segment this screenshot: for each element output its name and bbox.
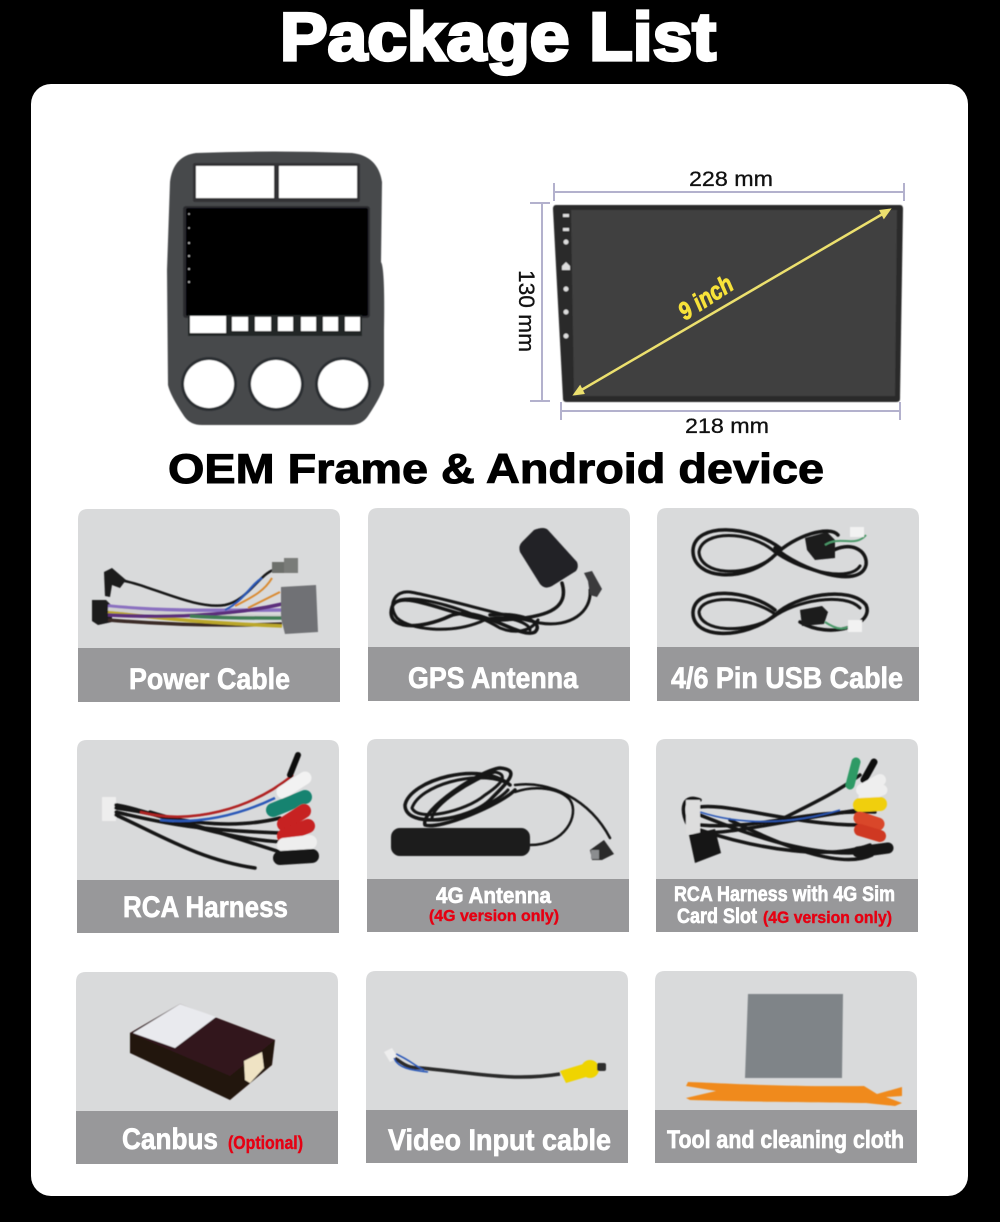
Android device with dimensions <box>514 168 904 438</box>
panel: RCA harness with 4G <box>656 739 918 932</box>
diagonal arrow <box>575 210 889 394</box>
label: Video Input cable <box>388 1124 611 1157</box>
panel: tool and cleaning cloth <box>655 971 917 1163</box>
width bottom: 218 mm <box>685 415 769 438</box>
note: (Optional) <box>228 1133 303 1153</box>
heading: OEM Frame & Android device <box>168 445 824 492</box>
panel: 4/6 pin USB cable <box>657 508 919 701</box>
label: RCA Harness <box>123 891 288 924</box>
9 inch label: 9 inch <box>673 270 739 326</box>
panel: video input cable <box>366 971 628 1163</box>
label: 4G Antenna <box>436 883 552 908</box>
label line 1: RCA Harness with 4G Sim <box>674 883 895 906</box>
title: Package List <box>280 0 716 75</box>
device screen <box>553 205 903 402</box>
panel: Canbus <box>76 972 338 1164</box>
note: (4G version only) <box>429 908 559 925</box>
panel: power cable <box>78 509 340 702</box>
label: GPS Antenna <box>408 662 578 695</box>
width top: 228 mm <box>689 168 773 191</box>
panel: 4G antenna <box>367 739 629 932</box>
height: 130 mm <box>514 270 539 352</box>
note: (4G version only) <box>763 908 892 927</box>
panel: GPS antenna <box>368 508 630 701</box>
dimension lines <box>530 183 904 420</box>
label: Power Cable <box>129 663 290 696</box>
label line 2: Card Slot <box>677 905 757 928</box>
label: Canbus <box>122 1123 218 1156</box>
label: Tool and cleaning cloth <box>667 1126 904 1154</box>
label: 4/6 Pin USB Cable <box>671 662 903 695</box>
OEM frame photo <box>167 152 384 425</box>
panel: RCA harness <box>77 740 339 933</box>
